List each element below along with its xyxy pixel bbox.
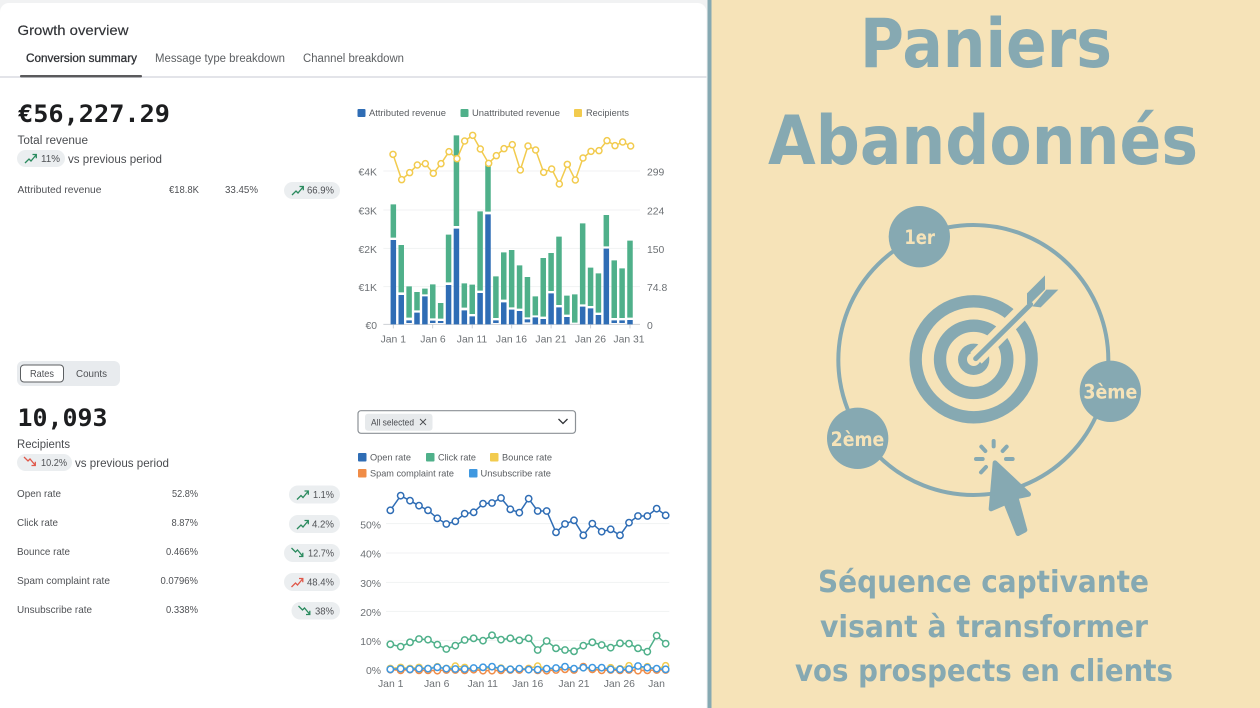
subtitle: [795, 565, 1173, 689]
row: spam complaint rate: Spam complaint rate: [17, 575, 110, 587]
y axis labels: 74.8: [647, 283, 667, 294]
title: Paniers: [860, 5, 1112, 84]
y axis labels: 10%: [360, 637, 381, 648]
row: open rate: Open rate: [17, 488, 61, 500]
y axis labels: 40%: [360, 550, 381, 560]
x axis labels: [378, 679, 665, 690]
panel: right title panel: [712, 0, 1260, 708]
total revenue summary: 11%: [41, 153, 60, 165]
icon: click cursor: [976, 441, 1029, 534]
recipients summary: 10.2%: [41, 457, 67, 469]
step: 3ème: [1080, 361, 1141, 422]
rates chart: legend: [358, 452, 552, 480]
row: attributed revenue: €18.8K: [169, 184, 199, 196]
subtitle: vos prospects en clients: [795, 654, 1173, 689]
rates chart: legend: Bounce rate: [502, 452, 552, 464]
y axis labels: 50%: [360, 520, 381, 531]
subtitle: Séquence captivante: [818, 565, 1149, 600]
y axis labels: 20%: [360, 608, 381, 619]
x axis labels: Jan 11: [467, 679, 498, 690]
recipients summary: Recipients: [17, 439, 70, 451]
revenue chart: bars and recipients line: [358, 108, 667, 346]
toggle: rates / counts: Counts: [76, 368, 107, 380]
recipients summary: [17, 404, 169, 471]
step: 1er: 1er: [904, 226, 935, 249]
x axis labels: Jan 26: [604, 679, 635, 690]
rates chart: legend: Open rate: [370, 452, 411, 464]
plot: [383, 135, 640, 328]
y axis labels: €2K: [358, 245, 377, 256]
row: unsubscribe rate: 0.338%: [166, 604, 198, 616]
title: [768, 5, 1198, 181]
x axis labels: Jan 11: [457, 335, 487, 346]
rates chart: legend: Unsubscribe rate: [480, 468, 551, 480]
y axis labels: [358, 168, 667, 332]
total revenue summary: vs previous period: [68, 152, 162, 166]
row: bounce rate: 0.466%: [166, 546, 198, 558]
row: bounce rate: 12.7%: [308, 548, 334, 560]
x axis labels: [381, 335, 645, 346]
cycle ring: [838, 225, 1108, 495]
row: click rate: Click rate: [17, 517, 58, 529]
x axis labels: Jan 6: [420, 335, 446, 346]
panel: dashboard card: [0, 3, 706, 708]
tabs: [20, 53, 404, 77]
diagram: sequence cycle: [827, 206, 1141, 534]
y axis labels: [360, 520, 381, 677]
icon: target with arrow: [916, 275, 1058, 417]
row: spam complaint rate: [17, 573, 340, 591]
row: attributed revenue: Attributed revenue: [18, 184, 102, 196]
tabs: Conversion summary: [26, 53, 137, 65]
x axis labels: Jan 31: [613, 335, 645, 346]
total revenue summary: Total revenue: [18, 135, 88, 147]
rates chart: legend: Spam complaint rate: [370, 468, 454, 480]
row: attributed revenue: [18, 182, 340, 199]
x axis labels: Jan 16: [512, 679, 544, 690]
row: bounce rate: Bounce rate: [17, 546, 70, 558]
chart legend: Attributed revenue: [369, 108, 446, 119]
toggle: rates / counts: [17, 361, 120, 386]
row: open rate: 52.8%: [172, 488, 198, 500]
step: 1er: [889, 206, 950, 267]
row: attributed revenue: 66.9%: [307, 184, 334, 196]
rates chart: line chart: [360, 496, 669, 690]
title: Abandonnés: [768, 102, 1198, 181]
tabs: Message type breakdown: [155, 53, 285, 65]
row: unsubscribe rate: 38%: [315, 606, 334, 618]
dropdown: all selected: [358, 411, 576, 433]
x axis labels: Jan: [648, 679, 665, 690]
row: spam complaint rate: 0.0796%: [160, 575, 198, 587]
x axis labels: Jan 1: [381, 335, 406, 346]
y axis labels: 0: [647, 321, 653, 332]
dropdown: all selected: All selected: [371, 418, 414, 428]
y axis labels: €0: [365, 321, 377, 332]
heading: growth overview: Growth overview: [18, 22, 129, 38]
row: click rate: 8.87%: [172, 517, 198, 529]
tabs: Channel breakdown: [303, 53, 404, 65]
y axis labels: 299: [647, 168, 665, 178]
row: bounce rate: [17, 544, 340, 562]
chart legend: Recipients: [586, 108, 629, 119]
y axis labels: 30%: [360, 579, 381, 590]
row: click rate: 4.2%: [312, 518, 334, 530]
recipients summary: 10,093: [18, 404, 108, 432]
divider bar: [708, 0, 712, 708]
rate rows: [17, 486, 340, 620]
y axis labels: €4K: [358, 168, 377, 178]
y axis labels: 150: [647, 245, 665, 256]
row: click rate: [17, 515, 340, 533]
x axis labels: Jan 1: [378, 679, 404, 690]
x axis labels: Jan 6: [424, 679, 450, 690]
y axis labels: €1K: [358, 283, 377, 294]
y axis labels: €3K: [358, 206, 377, 218]
row: spam complaint rate: 48.4%: [307, 576, 334, 588]
total revenue summary: [17, 100, 170, 167]
x axis labels: Jan 21: [558, 679, 590, 690]
toggle: rates / counts: Rates: [30, 368, 54, 380]
recipients summary: vs previous period: [75, 456, 169, 470]
row: unsubscribe rate: [17, 602, 340, 620]
chart legend: Unattributed revenue: [472, 108, 560, 119]
rates chart: legend: Click rate: [438, 452, 476, 464]
row: attributed revenue: 33.45%: [225, 184, 258, 196]
subtitle: visant à transformer: [820, 610, 1148, 645]
x axis labels: Jan 26: [575, 335, 606, 346]
y axis labels: 224: [647, 206, 665, 218]
x axis labels: Jan 21: [535, 335, 567, 346]
step: 2ème: 2ème: [831, 428, 884, 451]
y axis labels: 0%: [366, 666, 381, 677]
total revenue summary: €56,227.29: [18, 100, 170, 128]
row: open rate: [17, 486, 340, 504]
chart legend: [358, 108, 629, 119]
row: open rate: 1.1%: [313, 489, 334, 501]
plot: [386, 496, 669, 671]
row: unsubscribe rate: Unsubscribe rate: [17, 604, 92, 616]
step: 3ème: 3ème: [1083, 381, 1137, 404]
step: 2ème: [827, 408, 888, 469]
x axis labels: Jan 16: [496, 335, 527, 346]
